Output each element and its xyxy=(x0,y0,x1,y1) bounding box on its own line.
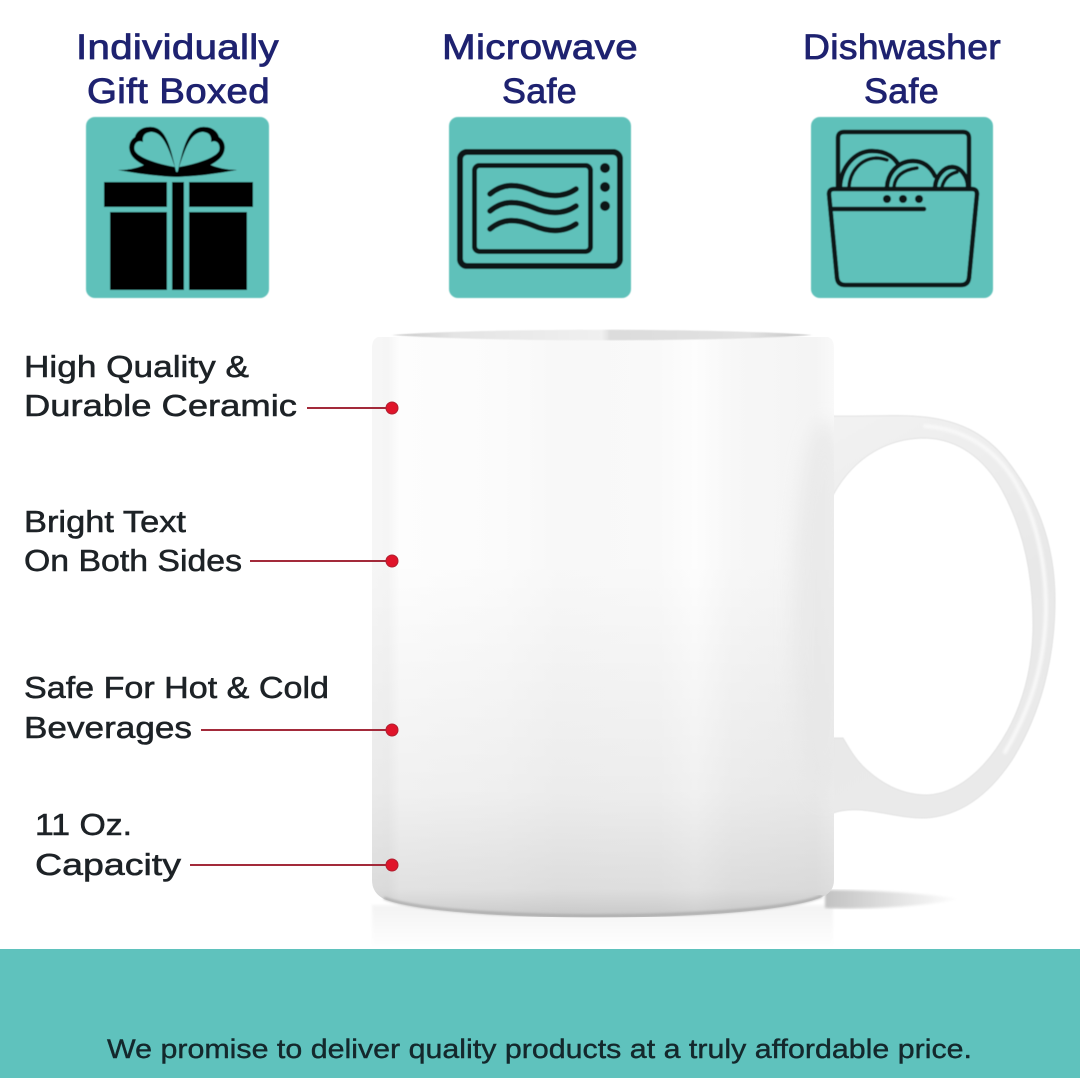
heading: dishwasher safe xyxy=(803,28,1001,111)
callout: high quality and durable ceramic: Durable Ceramic xyxy=(24,388,297,423)
callout: bright text on both sides: On Both Sides xyxy=(24,543,242,578)
callout: 11 oz capacity: Capacity xyxy=(35,847,182,882)
callout: 11 oz capacity: 11 Oz. xyxy=(35,807,132,842)
footer text: We promise to deliver quality products at a truly affordable price. xyxy=(107,1034,972,1064)
heading: dishwasher safe: Safe xyxy=(864,72,939,111)
footer band xyxy=(0,949,1080,1078)
heading: individually gift boxed: Individually xyxy=(76,28,279,67)
column: dishwasher safe xyxy=(803,28,1001,298)
callout: high quality and durable ceramic: High Quality & xyxy=(24,349,249,384)
callout: safe for hot and cold beverages: Beverages xyxy=(24,710,192,745)
mug base shadow line xyxy=(384,896,822,916)
callout: high quality and durable ceramic xyxy=(24,349,398,423)
mug body xyxy=(372,330,857,920)
callout: bright text on both sides xyxy=(24,504,398,578)
column: individually gift boxed xyxy=(76,28,279,298)
heading: dishwasher safe: Dishwasher xyxy=(803,28,1001,67)
mug reflection xyxy=(372,905,833,948)
callout: bright text on both sides: Bright Text xyxy=(24,504,186,539)
heading: individually gift boxed xyxy=(76,28,279,111)
mug handle xyxy=(832,416,1055,818)
callout: safe for hot and cold beverages xyxy=(24,670,398,745)
heading: individually gift boxed: Gift Boxed xyxy=(87,72,270,111)
icon: microwave xyxy=(449,117,631,298)
mug rim xyxy=(392,330,812,340)
mug illustration xyxy=(372,330,1055,948)
column: microwave safe xyxy=(442,28,638,298)
callout: safe for hot and cold beverages: Safe For Hot & Cold xyxy=(24,670,329,705)
mug cast shadow xyxy=(825,890,960,909)
icon: dishwasher xyxy=(811,117,993,298)
icon: gift box xyxy=(86,117,269,298)
heading: microwave safe: Safe xyxy=(502,72,577,111)
heading: microwave safe: Microwave xyxy=(442,28,638,67)
heading: microwave safe xyxy=(442,28,638,111)
handle highlight xyxy=(925,426,1046,752)
callout: 11 oz capacity xyxy=(35,807,398,882)
